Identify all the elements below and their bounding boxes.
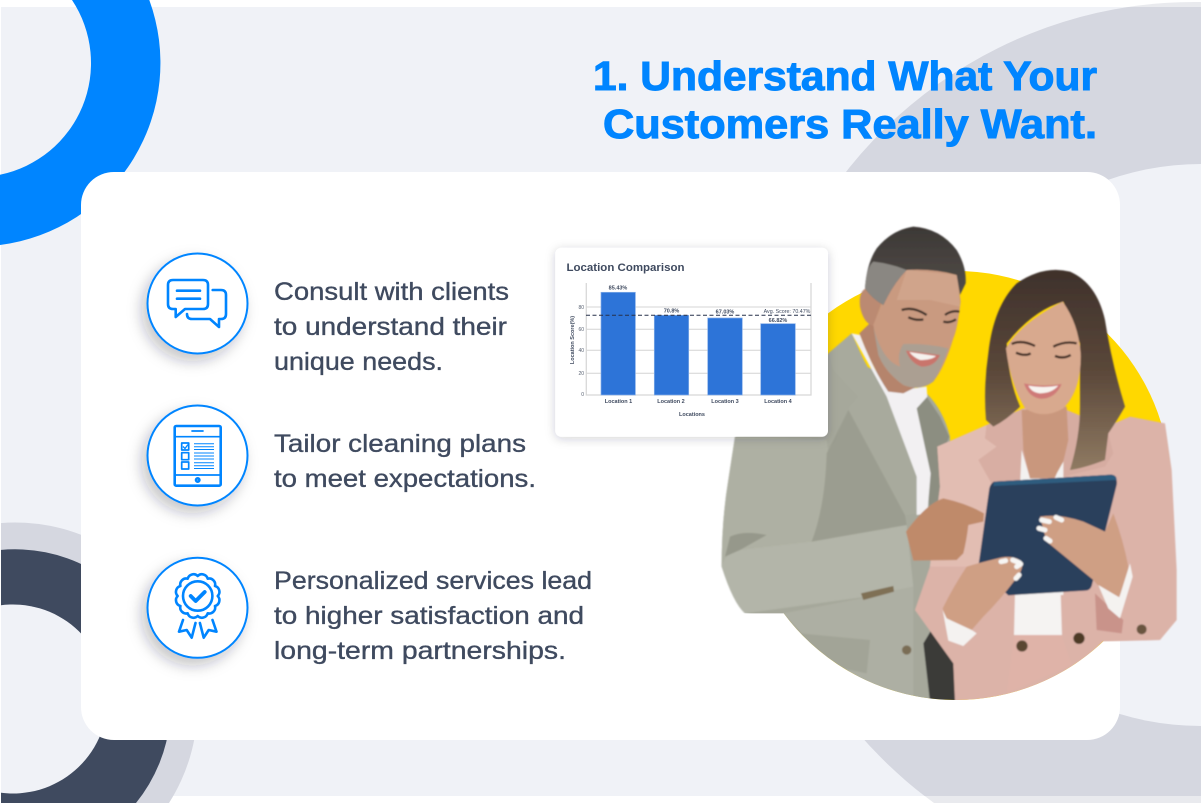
icon: tablet checklist (148, 406, 248, 506)
decorative blue ring (0, 0, 160, 245)
bar chart: 70.8% (664, 308, 679, 314)
man mouth (906, 351, 940, 367)
woman right cuff (1098, 563, 1133, 618)
bar chart (570, 283, 811, 418)
man hair (865, 227, 966, 305)
woman eyes and brows (1012, 342, 1077, 347)
man face (873, 268, 961, 388)
text: consult with clients: Consult with clients (274, 278, 509, 306)
woman face (1006, 302, 1081, 414)
bar chart: Location 2 (657, 399, 685, 405)
panel: main white card (81, 172, 1120, 740)
woman sleeve opening (1095, 593, 1123, 633)
nails (1001, 517, 1062, 578)
text: tailor cleaning plans (274, 430, 536, 493)
bar chart: Location 1 (605, 399, 632, 405)
man ear (860, 288, 882, 326)
text: consult with clients: unique needs. (274, 348, 443, 376)
tablet (978, 475, 1117, 595)
bar chart: Locations (679, 412, 705, 418)
bar chart: Location 3 (711, 399, 739, 405)
title: 1. Understand What Your (593, 53, 1097, 99)
decorative grey arc right (846, 2, 1201, 803)
text: tailor cleaning plans: Tailor cleaning plans (274, 430, 526, 458)
woman mouth (1024, 383, 1062, 399)
man pointing hand (906, 498, 984, 561)
title (593, 53, 1097, 147)
text: personalized services: long-term partnerships. (274, 637, 566, 665)
text: consult with clients: to understand their (274, 313, 507, 341)
bar chart: 0 (581, 392, 584, 398)
bar chart: 80 (578, 305, 584, 311)
icon: award badge (148, 558, 248, 658)
bar chart: 20 (578, 371, 584, 377)
woman right hand (1040, 513, 1128, 597)
woman neck (1022, 407, 1068, 478)
bar chart: 85.43% (609, 286, 627, 292)
man neck (858, 324, 914, 394)
chart card: location comparison (555, 248, 828, 437)
bar chart: 66.82% (769, 318, 787, 324)
bar chart: Location Score(%) (570, 316, 576, 364)
people (722, 227, 1177, 702)
bar chart: Avg. Score: 70.47% (764, 309, 811, 315)
man eyes and brows (902, 309, 959, 315)
text: consult with clients (274, 278, 509, 376)
bar chart: 40 (578, 348, 584, 354)
bar chart: Location 4 (764, 399, 793, 405)
bar chart: 60 (578, 327, 584, 333)
text: tailor cleaning plans: to meet expectations. (274, 465, 536, 493)
text: personalized services (274, 567, 592, 665)
yellow circle (742, 271, 1170, 700)
man shirt (852, 333, 931, 515)
woman left cuff (943, 610, 977, 646)
man beard (873, 327, 948, 388)
title: Customers Really Want. (603, 101, 1097, 147)
chart title: Location Comparison (566, 262, 685, 274)
woman jacket (915, 408, 1177, 702)
icon: chat bubbles (148, 254, 248, 354)
man dark gap (923, 627, 957, 702)
woman left hand (943, 557, 1023, 630)
decorative dark ring bottom left (0, 500, 198, 803)
text: personalized services: to higher satisfaction and (274, 602, 584, 630)
man left lapel (851, 334, 868, 368)
woman hair (985, 270, 1125, 470)
bar chart: 67.03% (716, 310, 734, 316)
jacket buttons (1073, 633, 1085, 644)
woman blouse (1015, 450, 1063, 595)
photo: two business people with tablet on yellow circle (722, 227, 1177, 702)
man jacket (735, 336, 952, 698)
man right lapel (917, 397, 949, 513)
text: personalized services: Personalized services lead (274, 567, 592, 595)
woman trousers (1026, 634, 1062, 637)
man sleeve buttons (861, 586, 894, 600)
